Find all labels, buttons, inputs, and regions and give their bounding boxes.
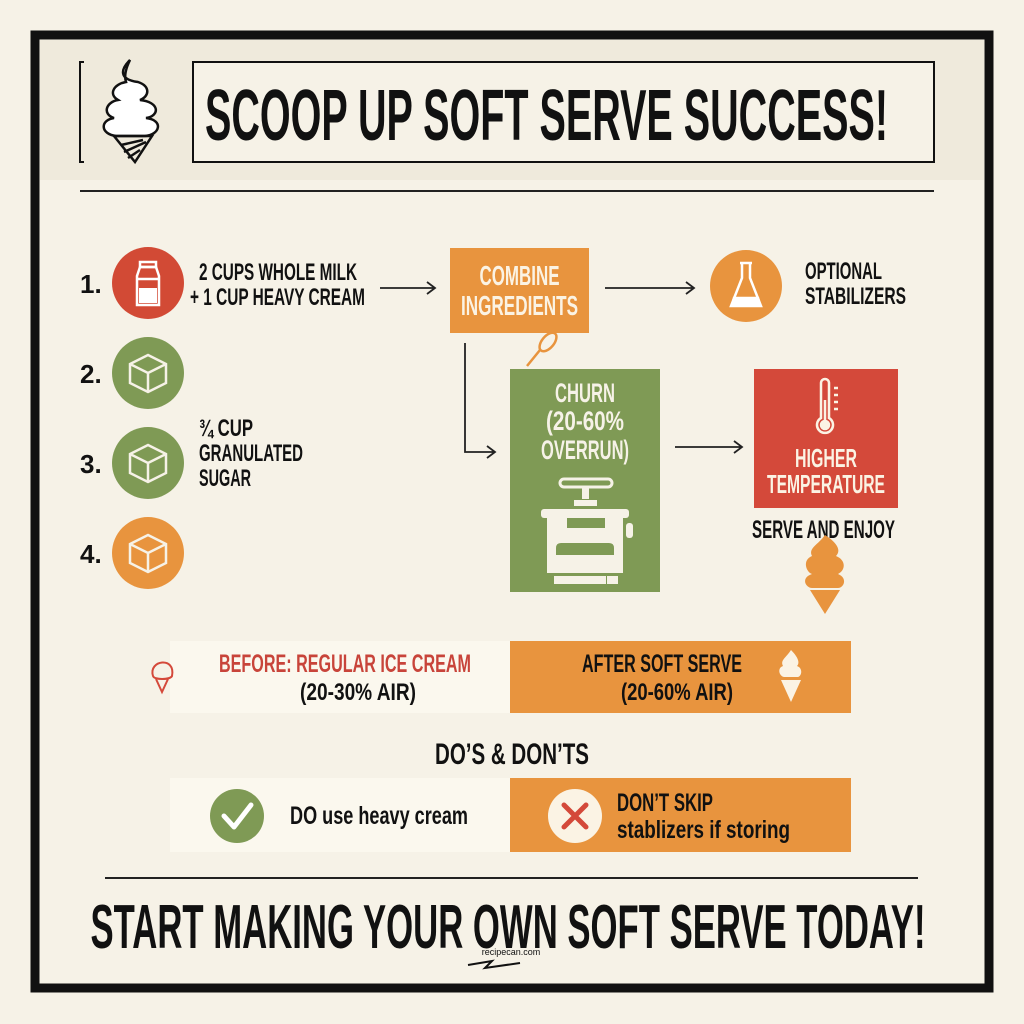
before / after bar: (20-30% AIR) xyxy=(300,679,416,706)
combine box xyxy=(450,248,589,333)
before / after bar: (20-60% AIR) xyxy=(621,679,733,706)
icon: cross xyxy=(548,789,602,843)
combine box: INGREDIENTS xyxy=(461,290,578,321)
churn box: CHURN xyxy=(555,378,615,408)
icon: thermometer xyxy=(817,379,838,433)
dos and donts bar xyxy=(170,778,851,852)
arrows xyxy=(380,282,742,458)
dos and donts bar: DO use heavy cream xyxy=(290,802,468,830)
dos and donts bar: stablizers if storing xyxy=(617,816,790,844)
optional stabilizers: OPTIONAL xyxy=(805,258,882,285)
serve and enjoy: SERVE AND ENJOY xyxy=(752,516,895,544)
higher temperature box: HIGHER xyxy=(795,443,857,473)
row 3 xyxy=(80,415,303,499)
row 1: 2 CUPS WHOLE MILK xyxy=(199,259,357,286)
row 4 xyxy=(80,517,184,589)
row 1 xyxy=(80,247,365,319)
header xyxy=(80,60,934,162)
dos and donts bar: DON’T SKIP xyxy=(617,789,713,817)
higher temperature box xyxy=(754,369,898,508)
dos and donts heading: DO’S & DON’TS xyxy=(435,738,589,771)
before / after bar: AFTER SOFT SERVE xyxy=(582,650,742,678)
row 3: 3. xyxy=(80,449,102,479)
row 1: 1. xyxy=(80,269,102,299)
icon: milk bottle xyxy=(137,262,159,305)
footer call to action: recipecan.com xyxy=(482,947,540,957)
row 3: GRANULATED xyxy=(199,440,303,467)
optional stabilizers: STABILIZERS xyxy=(805,283,906,310)
row 2 xyxy=(80,337,184,409)
serve and enjoy xyxy=(752,516,895,614)
row 2: 2. xyxy=(80,359,102,389)
ingredient rows xyxy=(80,247,365,589)
row 1: + 1 CUP HEAVY CREAM xyxy=(190,284,365,311)
icon: soft serve xyxy=(779,650,801,702)
churn box xyxy=(510,369,660,592)
icon: machine xyxy=(541,479,633,584)
combine box: COMBINE xyxy=(480,260,560,291)
churn box: (20-60% xyxy=(546,406,624,436)
row 3: SUGAR xyxy=(199,465,251,492)
churn box: OVERRUN) xyxy=(541,435,629,465)
before / after bar xyxy=(152,641,851,713)
icon: header cone xyxy=(80,60,158,162)
icon: check xyxy=(210,789,264,843)
icon: scoop xyxy=(152,662,172,692)
before / after bar: BEFORE: REGULAR ICE CREAM xyxy=(219,650,471,678)
row 3: ¾ CUP xyxy=(199,415,253,442)
row 4: 4. xyxy=(80,539,102,569)
icon: whisk xyxy=(527,330,560,366)
optional stabilizers xyxy=(710,250,906,322)
higher temperature box: TEMPERATURE xyxy=(767,469,885,499)
